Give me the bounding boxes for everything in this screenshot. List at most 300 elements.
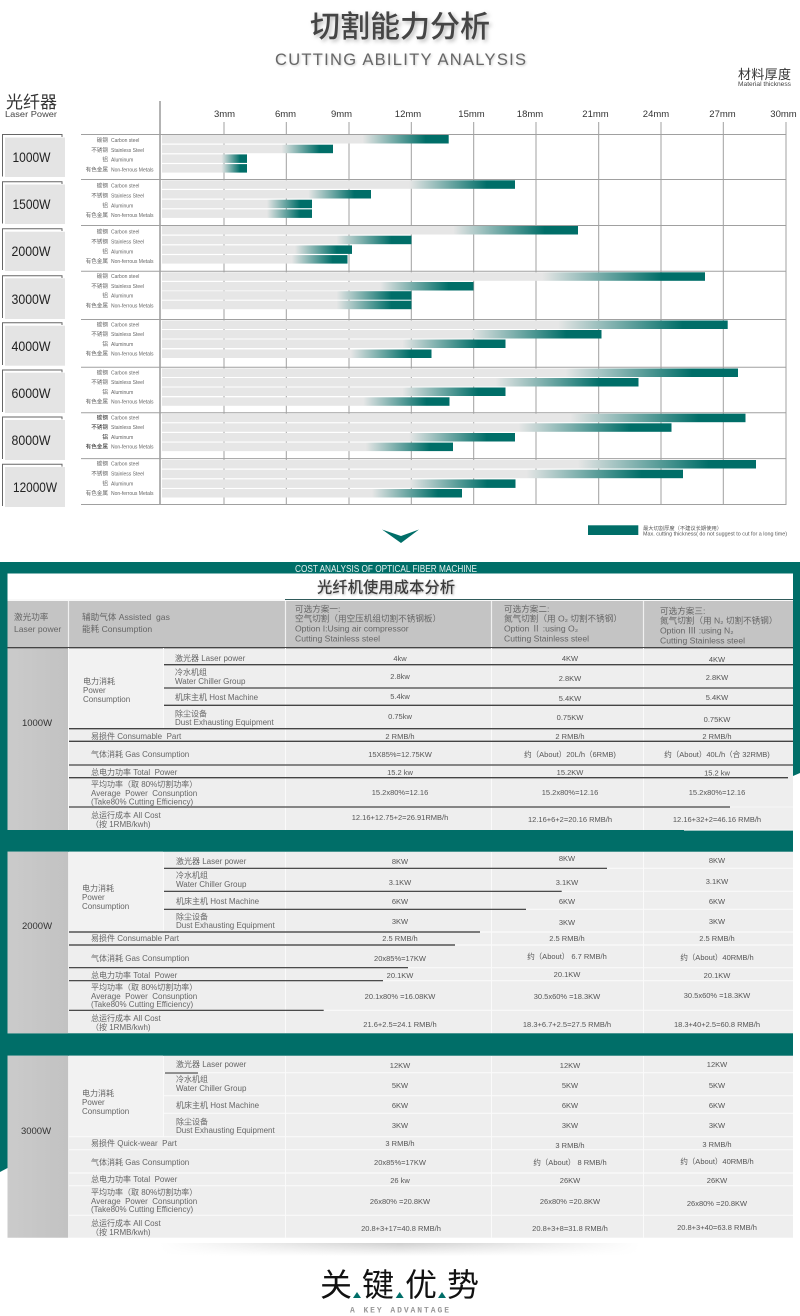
material labels <box>86 368 154 406</box>
values: option 1: 8KW <box>392 857 409 866</box>
power box: 12000W <box>2 464 65 507</box>
row labels: 气体消耗 Gas Consumption <box>91 1157 189 1167</box>
values: option 2: 3 RMB/h <box>555 1141 585 1150</box>
panel: cost analysis <box>0 562 800 1238</box>
power box: 4000W <box>2 323 65 366</box>
material labels: 有色金属 <box>86 302 108 310</box>
row labels: 除尘设备 <box>175 708 207 718</box>
material labels: 有色金属 <box>86 166 108 174</box>
values: option 1: 20x85%=17KW <box>374 954 427 963</box>
row labels: (Take80% Cutting Efficiency) <box>91 1000 193 1009</box>
row labels: 冷水机组 <box>176 870 208 880</box>
header: option 3: 氮气切割（用 N₂ 切割不锈钢） <box>660 614 777 626</box>
label: 3000W: 3000W <box>21 1126 51 1137</box>
bars <box>162 320 728 358</box>
material labels: 铝 <box>102 201 108 209</box>
values: option 2: 5KW <box>562 1081 579 1090</box>
values: option 3: 6KW <box>709 897 726 906</box>
values: option 1: 6KW <box>392 897 409 906</box>
material labels: Aluminum <box>111 158 133 164</box>
material labels: 碳钢 <box>97 136 108 144</box>
values: option 2: 3KW <box>562 1121 579 1130</box>
teal backdrop <box>0 562 800 1172</box>
material labels: Carbon steel <box>111 274 139 280</box>
material labels: 铝 <box>102 388 108 396</box>
material labels <box>86 460 154 497</box>
values: option 3: 15.2x80%=12.16 <box>689 788 745 797</box>
values: option 2: 30.5x60% =18.3KW <box>534 992 601 1001</box>
header: assisted gas: 辅助气体 Assisted gas <box>82 611 170 622</box>
material labels: Carbon steel <box>111 322 139 328</box>
values: option 2: 2.8KW <box>559 674 582 683</box>
material labels: 不锈钢 <box>91 192 108 200</box>
row labels: 总运行成本 All Cost <box>91 1218 162 1228</box>
values: option 3: 4KW <box>709 655 726 664</box>
material labels: Carbon steel <box>111 138 139 144</box>
power consumption label: 电力消耗 <box>82 883 114 893</box>
bars <box>162 272 705 309</box>
header: assisted gas <box>82 611 170 634</box>
material labels: Non-ferrous Metals <box>111 444 154 450</box>
material labels: 不锈钢 <box>91 470 108 478</box>
power box: 1500W <box>2 182 65 224</box>
material labels: 碳钢 <box>97 228 108 236</box>
values: option 2: 约（About） 6.7 RMB/h <box>527 951 607 961</box>
bars <box>162 368 738 406</box>
material labels <box>86 182 154 219</box>
header: assisted gas: 能耗 Consumption <box>82 623 152 634</box>
material labels: 不锈钢 <box>91 238 108 246</box>
material labels: Non-ferrous Metals <box>111 491 154 497</box>
values: option 1: 12KW <box>390 1061 411 1070</box>
material labels: Aluminum <box>111 342 133 348</box>
values: option 1: 20.1x80% =16.08KW <box>365 992 436 1001</box>
axis labels: 15mm <box>458 109 485 120</box>
row labels: 平均功率（取 80%切割功率） <box>91 1187 197 1197</box>
values: option 2: 6KW <box>562 1101 579 1110</box>
row: 4000W <box>2 320 728 366</box>
material labels: 有色金属 <box>86 350 108 358</box>
axis labels: 9mm <box>331 109 352 120</box>
axis labels: 6mm <box>275 109 296 120</box>
values: option 1: 15X85%=12.75KW <box>368 750 433 759</box>
material labels: 不锈钢 <box>91 282 108 290</box>
material labels: Aluminum <box>111 390 133 396</box>
row labels: 总电力功率 Total Power <box>91 767 178 777</box>
material labels: 铝 <box>102 156 108 164</box>
material labels <box>86 228 154 265</box>
power consumption label: 电力消耗 <box>83 676 115 686</box>
values: option 2: 26x80% =20.8KW <box>540 1197 601 1206</box>
values: option 3: 约（About）40RMB/h <box>680 1156 754 1166</box>
values: option 1: 3KW <box>392 917 409 926</box>
material labels: Aluminum <box>111 294 133 300</box>
heading: material thickness: 材料厚度 <box>738 67 791 82</box>
row labels: 总电力功率 Total Power <box>91 1174 178 1184</box>
row labels: 机床主机 Host Machine <box>176 1100 260 1110</box>
values: option 3: 15.2 kw <box>704 768 731 778</box>
values: option 1: 0.75kw <box>388 712 412 721</box>
values: option 1: 12.16+12.75+2=26.91RMB/h <box>352 813 448 822</box>
row labels: 总运行成本 All Cost <box>91 810 162 820</box>
values: option 1: 2.8kw <box>390 672 410 681</box>
material labels: Stainless Steel <box>111 472 144 478</box>
row labels: 机床主机 Host Machine <box>175 692 259 702</box>
power box: 12000W: 12000W <box>13 479 58 495</box>
power consumption label <box>83 676 130 704</box>
row labels: 机床主机 Host Machine <box>176 896 260 906</box>
bars <box>162 135 449 173</box>
values: option 3 <box>664 655 770 824</box>
power consumption label: Power <box>83 686 106 695</box>
axis labels: 3mm <box>214 109 235 120</box>
header: option 3 <box>660 605 777 646</box>
values: option 1: 2 RMB/h <box>385 732 415 741</box>
values: option 1: 15.2x80%=12.16 <box>372 788 428 797</box>
header: option 3: 可选方案三: <box>660 605 705 616</box>
material labels: 铝 <box>102 292 108 300</box>
subtitle: CUTTING ABILITY ANALYSIS <box>275 51 526 69</box>
power consumption label: 电力消耗 <box>82 1088 114 1098</box>
values: option 3: 5KW <box>709 1081 726 1090</box>
row labels: 平均功率（取 80%切割功率） <box>91 982 197 992</box>
power box: 1000W <box>2 134 65 177</box>
values: option 2: 20.1KW <box>554 970 581 979</box>
header: option 3: Cutting Stainless steel <box>660 636 745 646</box>
material labels: Non-ferrous Metals <box>111 259 154 265</box>
heading: laser power: 光纤器 <box>6 93 57 112</box>
material labels <box>86 272 154 310</box>
material labels <box>86 413 154 450</box>
values: option 3: 3KW <box>709 917 726 926</box>
row: 1000W <box>2 134 449 177</box>
power box: 1500W: 1500W <box>12 196 51 212</box>
values: option 2: 2.5 RMB/h <box>549 934 585 943</box>
power consumption label <box>82 1088 129 1116</box>
row labels: 气体消耗 Gas Consumption <box>91 749 189 759</box>
row: 6000W <box>2 368 738 413</box>
material labels: 有色金属 <box>86 442 108 450</box>
values: option 1: 4kw <box>393 654 407 663</box>
material labels: 铝 <box>102 479 108 487</box>
values: option 2: 6KW <box>559 897 576 906</box>
values: option 1: 3.1KW <box>389 878 412 887</box>
values: option 2: 15.2KW <box>557 768 584 777</box>
row labels: 激光器 Laser power <box>176 1059 247 1069</box>
row labels: （按 1RMB/kwh) <box>91 1227 151 1237</box>
values: option 2: 12.16+6+2=20.16 RMB/h <box>528 815 612 824</box>
power consumption label <box>82 883 129 911</box>
heading: key advantage: 优 <box>405 1267 437 1303</box>
row: 3000W <box>2 272 705 319</box>
row: 8000W <box>2 413 746 460</box>
heading: laser power: Laser Power <box>5 109 57 119</box>
values: option 1: 6KW <box>392 1101 409 1110</box>
heading: key advantage: A KEY ADVANTAGE <box>350 1306 449 1316</box>
table header <box>8 600 793 648</box>
values: option 3: 5.4KW <box>706 693 729 702</box>
row labels: Water Chiller Group <box>175 677 246 686</box>
values: option 1: 20x85%=17KW <box>374 1158 427 1167</box>
power consumption label: Consumption <box>83 695 130 704</box>
power box: 6000W: 6000W <box>12 385 51 401</box>
values: option 1 <box>363 857 437 1029</box>
row labels: (Take80% Cutting Efficiency) <box>91 798 193 806</box>
table: 2000W <box>8 852 793 1033</box>
table drop shadow <box>160 1243 640 1256</box>
values: option 2: 15.2x80%=12.16 <box>542 788 598 797</box>
values: option 1: 15.2 kw <box>387 768 414 777</box>
values: option 2: 18.3+6.7+2.5=27.5 RMB/h <box>523 1020 611 1029</box>
material labels: 有色金属 <box>86 211 108 219</box>
material labels: Stainless Steel <box>111 380 144 386</box>
material labels: Non-ferrous Metals <box>111 304 154 310</box>
axis labels: 21mm <box>582 109 609 120</box>
values: option 1: 26x80% =20.8KW <box>370 1197 431 1206</box>
values: option 3: 3 RMB/h <box>702 1140 732 1149</box>
row labels: Water Chiller Group <box>176 880 247 889</box>
row labels <box>91 653 274 829</box>
header: option 2: 氮气切割（用 O₂ 切割不锈钢） <box>504 612 622 624</box>
values: option 1: 3KW <box>392 1121 409 1130</box>
header: option 2 <box>504 603 622 644</box>
material labels: Carbon steel <box>111 230 139 236</box>
row labels <box>91 1059 276 1237</box>
heading: material thickness: Material thickness <box>738 82 791 88</box>
values: option 3: 2.5 RMB/h <box>699 934 735 943</box>
values: option 3: 约（About）40L/h（合 32RMB) <box>664 749 770 759</box>
header: option 1: 空气切割（用空压机组切割不锈钢板） <box>295 612 441 624</box>
panel caption: COST ANALYSIS OF OPTICAL FIBER MACHINE <box>295 564 477 575</box>
power box: 3000W <box>2 276 65 319</box>
chart grid <box>81 101 786 505</box>
values: option 2: 3.1KW <box>556 878 579 887</box>
values: option 3: 26x80% =20.8KW <box>687 1199 748 1208</box>
row labels: 除尘设备 <box>176 912 208 922</box>
values: option 3: 3.1KW <box>706 877 729 886</box>
material labels: 碳钢 <box>97 320 108 328</box>
material labels: Stainless Steel <box>111 194 144 200</box>
material labels: Aluminum <box>111 203 133 209</box>
row labels: Average Power Consunption <box>91 992 197 1001</box>
row: 12000W <box>2 460 756 507</box>
values: option 3: 3KW <box>709 1121 726 1130</box>
values: option 3: 30.5x60% =18.3KW <box>684 991 751 1000</box>
values: option 2: 26KW <box>560 1176 581 1185</box>
header: option 1: 可选方案一: <box>295 603 340 614</box>
material labels: 不锈钢 <box>91 330 108 338</box>
material labels: 碳钢 <box>97 182 108 190</box>
material labels: 碳钢 <box>97 460 108 468</box>
material labels: 铝 <box>102 340 108 348</box>
values: option 3: 26KW <box>707 1176 728 1185</box>
values: option 2: 约（About）20L/h（6RMB) <box>524 749 616 759</box>
power box: 3000W: 3000W <box>12 291 51 307</box>
material labels: Stainless Steel <box>111 425 144 431</box>
material labels: Carbon steel <box>111 370 139 376</box>
values: option 2: 约（About） 8 RMB/h <box>533 1157 607 1167</box>
axis labels: 30mm <box>770 109 797 120</box>
legend: maximum cutting thickness <box>588 524 787 537</box>
material labels: Carbon steel <box>111 462 139 468</box>
arrow: down chevron <box>382 530 419 543</box>
row labels: 平均功率（取 80%切割功率） <box>91 779 197 789</box>
material labels: Aluminum <box>111 249 133 255</box>
values: option 3: 12.16+32+2=46.16 RMB/h <box>673 815 761 824</box>
row labels: 除尘设备 <box>176 1116 208 1126</box>
values: option 2 <box>532 1061 608 1233</box>
row labels: Water Chiller Group <box>176 1084 247 1093</box>
values: option 3: 18.3+40+2.5=60.8 RMB/h <box>674 1020 760 1029</box>
values: option 2: 2 RMB/h <box>555 732 585 741</box>
label: 1000W: 1000W <box>22 718 52 729</box>
header: option 2: 可选方案二: <box>504 603 549 614</box>
material labels: 碳钢 <box>97 413 108 421</box>
row labels: Dust Exhausting Equipment <box>176 921 276 930</box>
row labels: 激光器 Laser power <box>176 856 247 866</box>
row labels: （按 1RMB/kwh) <box>91 1022 151 1032</box>
row labels: 总电力功率 Total Power <box>91 970 178 980</box>
values: option 3: 2.8KW <box>706 673 729 682</box>
values: option 3: 约（About）40RMB/h <box>680 952 754 962</box>
values: option 1: 3 RMB/h <box>385 1139 415 1148</box>
heading: key advantage: 势 <box>447 1267 479 1303</box>
power box: 2000W: 2000W <box>12 243 51 259</box>
row labels: 激光器 Laser power <box>175 653 246 663</box>
material labels: 不锈钢 <box>91 378 108 386</box>
table: 3000W <box>8 1056 793 1238</box>
material labels: 铝 <box>102 433 108 441</box>
values: option 1: 20.8+3+17=40.8 RMB/h <box>361 1224 441 1233</box>
table: 1000W <box>8 648 793 830</box>
axis labels: 12mm <box>395 109 421 120</box>
header: laser power: Laser power <box>14 624 61 634</box>
material labels: Carbon steel <box>111 184 139 190</box>
power consumption label: Power <box>82 893 105 902</box>
values: option 1: 5KW <box>392 1081 409 1090</box>
values: option 2: 20.8+3+8=31.8 RMB/h <box>532 1224 608 1233</box>
header: option 2: Option Ⅱ :using O₂ <box>504 624 578 634</box>
legend: maximum cutting thickness: Max. cutting thickness( do not suggest to cut for a long time) <box>643 531 787 537</box>
material labels: Stainless Steel <box>111 148 144 154</box>
material labels: Stainless Steel <box>111 240 144 246</box>
header: laser power <box>14 611 61 634</box>
row labels: 易损件 Consumable Part <box>91 933 180 943</box>
power box: 4000W: 4000W <box>12 338 51 354</box>
values: option 3: 20.1KW <box>704 971 731 980</box>
material labels <box>86 320 154 358</box>
row labels: Dust Exhausting Equipment <box>175 718 274 727</box>
axis labels: 18mm <box>517 109 543 120</box>
values: option 1: 20.1KW <box>387 971 414 980</box>
material labels: Non-ferrous Metals <box>111 352 154 358</box>
values: option 1 <box>352 654 448 822</box>
values: option 2: 3KW <box>559 918 576 927</box>
heading: key advantage: 关 <box>320 1267 352 1303</box>
bars <box>162 226 578 264</box>
heading: key advantage: 键 <box>362 1267 394 1303</box>
header: option 2: Cutting Stainless steel <box>504 634 589 644</box>
values: option 1: 21.6+2.5=24.1 RMB/h <box>363 1020 437 1029</box>
material labels: Aluminum <box>111 435 133 441</box>
power box: 8000W: 8000W <box>12 432 51 448</box>
values: option 3 <box>674 856 760 1029</box>
row labels <box>91 856 276 1032</box>
material labels: 碳钢 <box>97 368 108 376</box>
header: option 1: Cutting Stainless steel <box>295 634 380 644</box>
row labels: 气体消耗 Gas Consumption <box>91 953 189 963</box>
panel title <box>8 574 793 600</box>
values: option 2: 12KW <box>560 1061 581 1070</box>
label: 2000W: 2000W <box>22 921 52 932</box>
power box: 6000W <box>2 370 65 413</box>
material labels: Stainless Steel <box>111 332 144 338</box>
row labels: (Take80% Cutting Efficiency) <box>91 1205 193 1214</box>
row: 2000W <box>2 226 578 271</box>
material labels: Non-ferrous Metals <box>111 400 154 406</box>
values: option 3: 0.75KW <box>704 715 731 724</box>
values: option 1: 5.4kw <box>390 692 410 701</box>
power consumption label: Power <box>82 1098 105 1107</box>
values: option 3: 12KW <box>707 1060 728 1069</box>
axis labels: 27mm <box>709 109 736 120</box>
chart: cutting thickness by laser power <box>2 101 797 507</box>
values: option 2 <box>523 854 611 1029</box>
header: option 1: Option I:Using air compressor <box>295 624 409 634</box>
power consumption label: Consumption <box>82 1107 129 1116</box>
bars <box>162 180 515 218</box>
material labels: 铝 <box>102 247 108 255</box>
header: laser power: 激光功率 <box>14 611 49 622</box>
material labels: Non-ferrous Metals <box>111 213 154 219</box>
values: option 3: 6KW <box>709 1101 726 1110</box>
material labels: 碳钢 <box>97 272 108 280</box>
material labels: 有色金属 <box>86 489 108 497</box>
row labels: 总运行成本 All Cost <box>91 1013 162 1023</box>
axis labels: 24mm <box>643 109 669 120</box>
values: option 1: 26 kw <box>390 1176 410 1185</box>
material labels: 有色金属 <box>86 398 108 406</box>
values: option 3: 20.8+3+40=63.8 RMB/h <box>677 1223 757 1232</box>
panel title: 光纤机使用成本分析 <box>317 580 455 596</box>
bars <box>162 414 746 451</box>
material labels: Aluminum <box>111 481 133 487</box>
values: option 3: 2 RMB/h <box>702 732 732 741</box>
power box: 1000W: 1000W <box>12 149 51 165</box>
material labels: 有色金属 <box>86 257 108 265</box>
power consumption label: Consumption <box>82 902 129 911</box>
material labels <box>86 136 154 174</box>
values: option 3 <box>677 1060 757 1232</box>
row labels: 冷水机组 <box>176 1074 208 1084</box>
header: option 1 <box>295 603 441 644</box>
heading: key advantage <box>320 1267 479 1316</box>
legend: maximum cutting thickness: 最大切割厚度（不建议长期使用） <box>643 524 722 532</box>
power box: 2000W <box>2 229 65 271</box>
row labels: Dust Exhausting Equipment <box>176 1126 276 1135</box>
material labels: 不锈钢 <box>91 146 108 154</box>
row labels: （按 1RMB/kwh) <box>91 819 151 829</box>
row labels: 易损件 Consumable Part <box>91 731 182 741</box>
axis labels <box>214 109 797 120</box>
values: option 1: 2.5 RMB/h <box>382 934 418 943</box>
title: 切割能力分析 <box>310 11 490 44</box>
power box: 8000W <box>2 417 65 460</box>
values: option 2: 8KW <box>559 854 576 863</box>
values: option 1 <box>361 1061 441 1233</box>
bars <box>162 460 756 498</box>
material labels: Non-ferrous Metals <box>111 168 154 174</box>
